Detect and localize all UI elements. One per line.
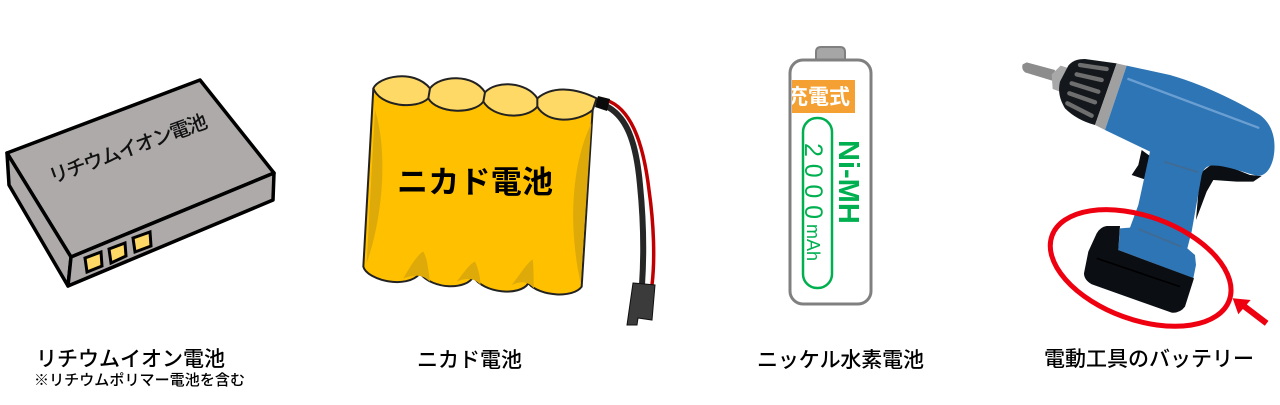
capacity pill outline [803, 118, 832, 288]
pack top with four cell ends [373, 76, 597, 120]
pack printed label: ニカド電池 [397, 165, 553, 200]
capacity unit: mAh [803, 224, 823, 261]
capacity text: 2000 [799, 143, 827, 219]
icon: cordless drill with circled battery [1022, 59, 1275, 349]
band text: 充電式 [787, 86, 850, 109]
chuck grip ribs [1067, 65, 1107, 116]
cell dividers [428, 88, 537, 107]
chuck [1059, 59, 1117, 125]
label: nickel-cadmium battery: ニカド電池 [417, 349, 522, 372]
drill bit [1022, 62, 1055, 81]
label: power tool battery: 電動工具のバッテリー [1044, 348, 1254, 371]
cell body [790, 60, 871, 304]
icon: nickel-cadmium battery pack [363, 76, 655, 325]
trigger [1132, 150, 1153, 180]
black shadow under body [1196, 164, 1262, 220]
body shading [367, 110, 591, 288]
red arrow [1233, 298, 1267, 323]
note: includes lithium polymer: ※リチウムポリマー電池を含む [34, 372, 245, 389]
drill bit collar [1052, 66, 1069, 92]
battery top face [7, 80, 274, 257]
cell terminal cap [816, 47, 845, 60]
icon: lithium-ion battery [7, 80, 274, 286]
orange rechargeable band [792, 80, 855, 113]
battery printed label: リチウムイオン電池 [46, 110, 211, 189]
blue drill body [1105, 66, 1275, 278]
battery front face [68, 173, 274, 286]
pack drawing [363, 76, 597, 294]
icon: rechargeable Ni-MH AA cell [787, 47, 871, 304]
pack body [363, 88, 593, 294]
connector plug [627, 283, 655, 325]
red highlight ellipse [1034, 187, 1247, 349]
battery contacts [85, 232, 151, 272]
label: nickel-metal hydride battery: ニッケル水素電池 [757, 349, 924, 372]
label: lithium-ion battery: リチウムイオン電池 [36, 348, 225, 371]
chemistry label: Ni-MH [832, 140, 864, 224]
battery left side face [7, 153, 71, 286]
battery groove [1097, 258, 1180, 287]
silver band [1095, 63, 1127, 130]
body seam lines [1138, 162, 1198, 247]
body highlight [1128, 79, 1258, 128]
wire clamp [595, 96, 610, 111]
connector wires [606, 100, 654, 285]
battery pack [1084, 226, 1194, 313]
